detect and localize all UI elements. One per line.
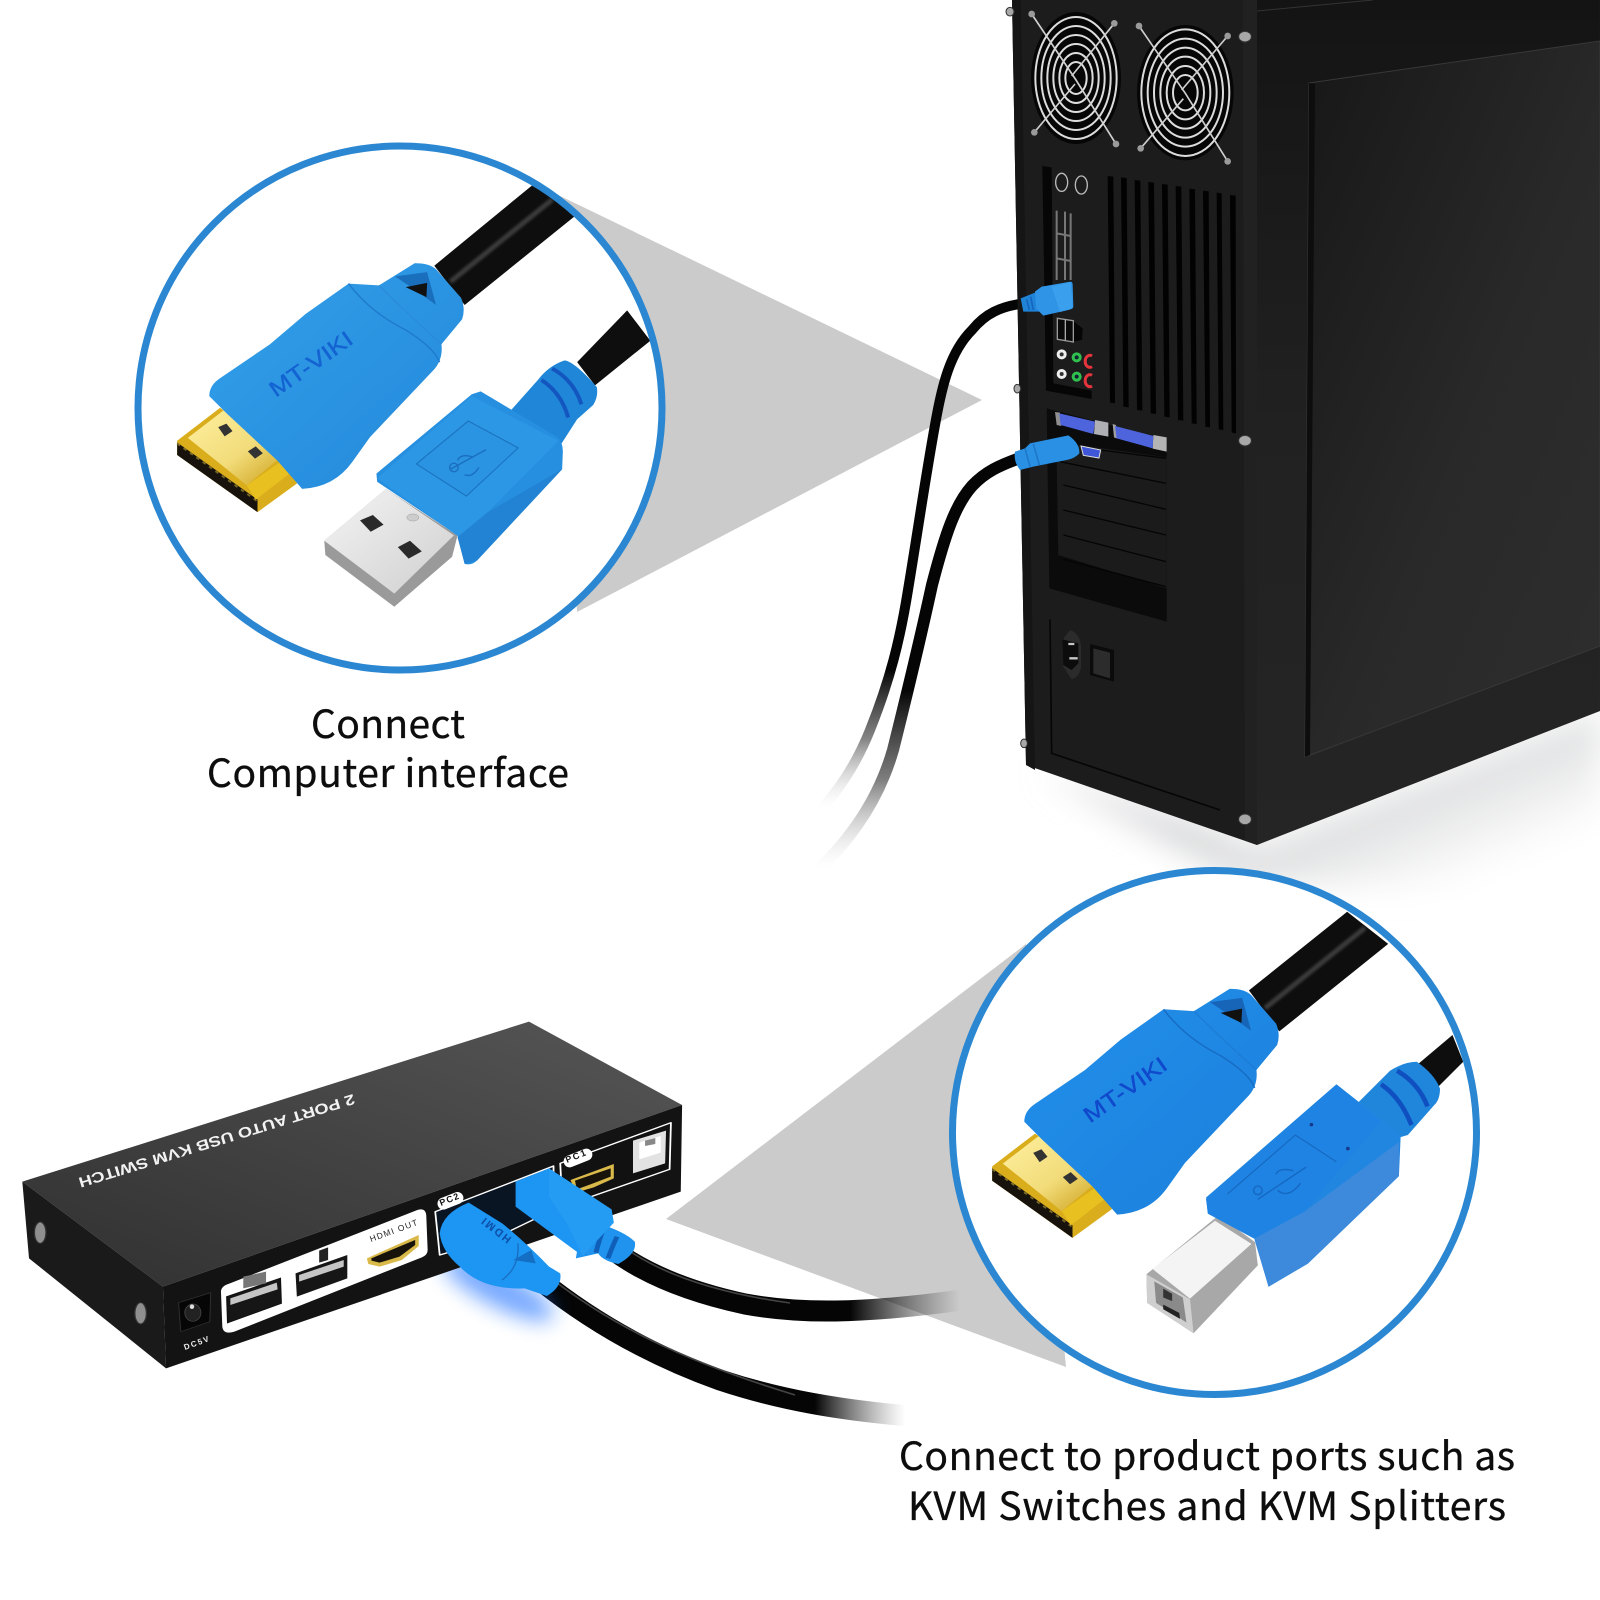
USB-B cable [1419,1035,1463,1087]
HDMI OUT label: HDMI OUT [368,1217,419,1244]
HDMI gold head [177,408,300,512]
USB-B strain relief [1358,1062,1440,1138]
blue glow under HDMI plug [435,1243,561,1333]
DC power jack [179,1293,211,1332]
HDMI plug in tower [1021,282,1073,316]
KVM top label: 2 PORT AUTO USB KVM SWITCH [76,1090,357,1190]
rear I/O panel [1042,166,1092,399]
PC1 HDMI port [570,1164,614,1193]
DC5V label: DC5V [183,1334,211,1352]
USB-A blue boot [376,391,563,564]
HDMI blue boot [1024,989,1279,1215]
PC1 label [562,1147,594,1169]
callout wedge: KVM ports [666,944,1066,1367]
HDMI text on KVM plug: HDMI [480,1215,514,1245]
PC2 port panel [435,1166,554,1255]
ventilation slots [1108,176,1236,433]
MT-VIKI brand text: MT-VIKI [264,326,358,402]
floor shadow behind tower [1040,711,1600,885]
cable: USB to computer [818,458,1020,870]
VGA ports and lower expansion bay [1047,408,1167,622]
KVM top face [22,1022,682,1287]
caption: connect to product ports: KVM Switches and KVM Splitters [908,1476,1506,1532]
PC2 label: PC2 [438,1191,460,1208]
magnifier circle: HDMI and USB-B plugs [952,870,1476,1394]
PC1 label: PC1 [564,1148,587,1165]
KVM end face with screws [22,1182,166,1368]
MT-VIKI brand text: MT-VIKI [1079,1052,1172,1128]
caption: connect computer interface: Computer interface [207,743,569,799]
cooling fan left [1028,11,1121,147]
KVM switch box [22,1022,682,1368]
power socket and switch [1050,619,1220,810]
KVM cable lower USB [613,1250,962,1311]
tower side panel [1257,0,1600,845]
USB-A silver plug [324,489,457,607]
callout wedge: computer interface [556,194,982,612]
USB plug into KVM [516,1168,635,1264]
KVM cable lower HDMI [540,1279,910,1416]
cable: HDMI to computer [822,303,1027,808]
tower rear face [1012,0,1257,845]
USB-B silver plug [1146,1215,1258,1333]
HDMI plug into KVM [440,1203,561,1296]
cooling fan right [1136,23,1234,165]
magnifier circle: HDMI and USB-A plugs [138,146,662,670]
case screws [1006,7,1251,825]
keyboard USB port [227,1272,281,1323]
PC2 label [436,1190,465,1211]
mouse USB port [296,1247,347,1297]
USB-B blue boot [1206,1084,1401,1287]
computer tower [1006,0,1600,845]
caption: connect to product ports: Connect to product ports such as [899,1426,1515,1482]
white console port plate [221,1209,428,1333]
HDMI cable [434,184,575,305]
HDMI gold head [992,1134,1115,1238]
caption: connect to product ports [899,1426,1515,1532]
PC1 port panel [560,1123,671,1207]
KVM port face [163,1105,682,1368]
HDMI out port [367,1235,419,1267]
USB plug in tower [1015,435,1079,470]
HDMI blue boot [209,263,464,489]
caption: connect computer interface: Connect [311,694,465,750]
HDMI cable [1249,912,1388,1031]
caption: connect computer interface [207,694,569,799]
USB-A strain relief [509,360,597,444]
USB-B port [633,1131,666,1173]
USB-A cable [577,310,650,385]
